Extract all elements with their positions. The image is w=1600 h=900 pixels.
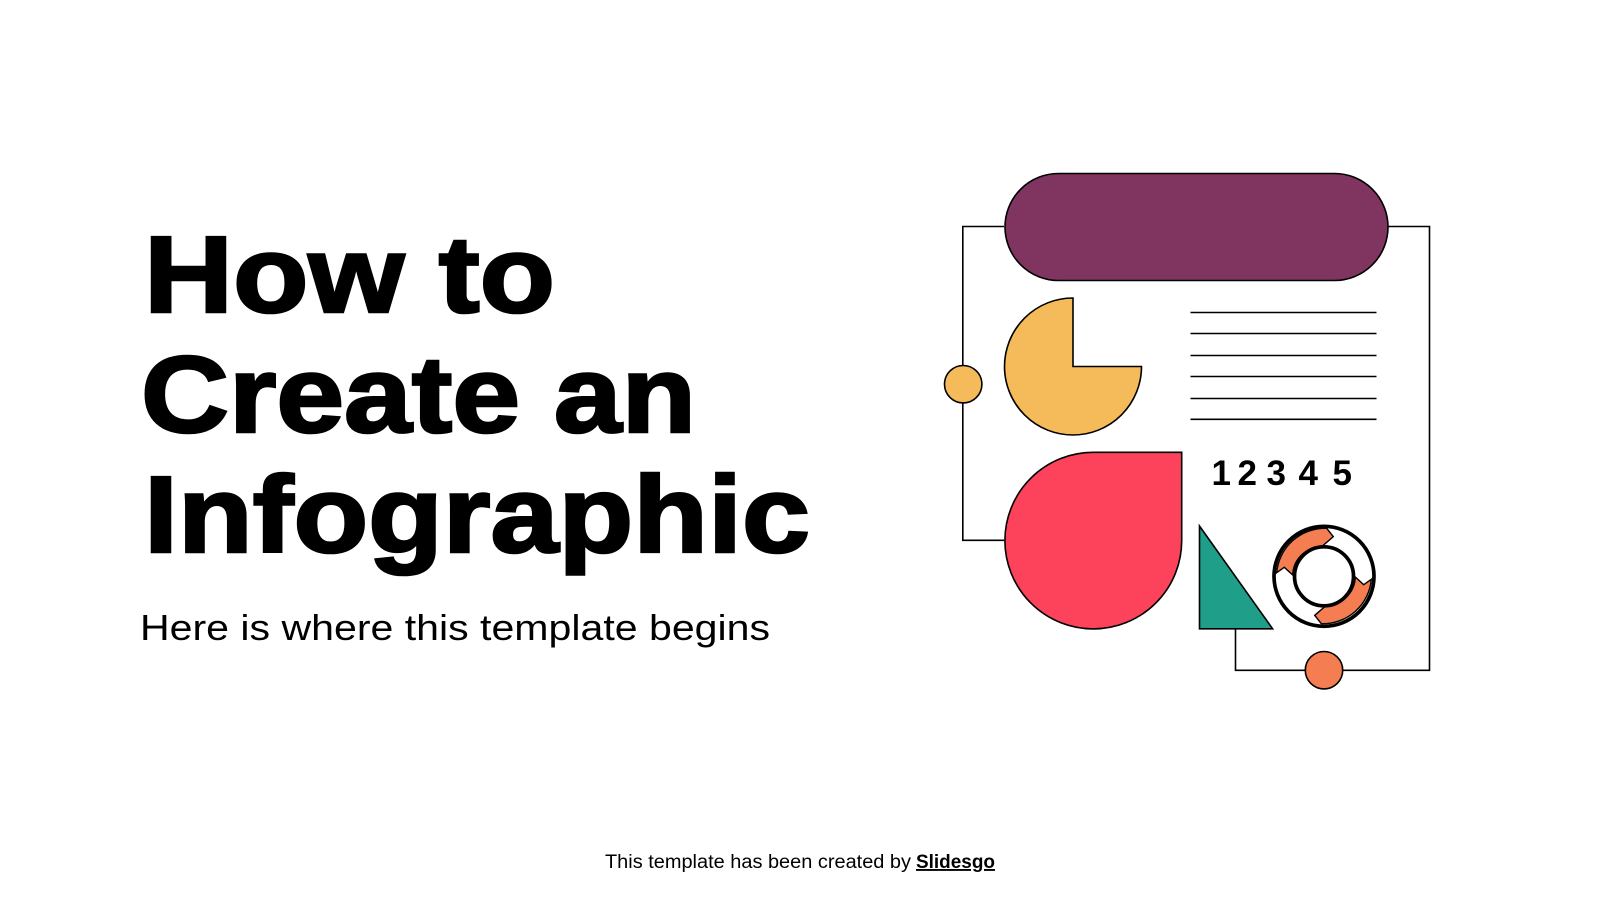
orange node circle bbox=[1305, 652, 1343, 689]
connector frame bbox=[963, 226, 1430, 670]
title: Infographic bbox=[144, 454, 810, 576]
purple pill banner bbox=[1005, 174, 1388, 280]
title: Create an bbox=[141, 334, 696, 456]
orange arrow segment bottom bbox=[1315, 577, 1371, 624]
footer credit: Slidesgo bbox=[916, 852, 995, 873]
title: How to bbox=[144, 214, 555, 336]
ring outlines bbox=[1274, 526, 1374, 626]
title bbox=[141, 214, 810, 576]
numbers 1 to 5: 12345 bbox=[1212, 454, 1352, 493]
text lines bbox=[1190, 312, 1376, 419]
teal triangle bbox=[1200, 526, 1273, 629]
footer credit: This template has been created by bbox=[605, 852, 912, 873]
circular arrows ring bbox=[1274, 526, 1374, 626]
small yellow circle bbox=[944, 366, 982, 403]
illustration: infographic diagram bbox=[944, 174, 1430, 689]
red teardrop bbox=[1005, 452, 1182, 629]
subtitle: Here is where this template begins bbox=[140, 607, 770, 648]
yellow pie chart bbox=[1005, 298, 1142, 435]
orange arrow segment top bbox=[1277, 528, 1333, 575]
